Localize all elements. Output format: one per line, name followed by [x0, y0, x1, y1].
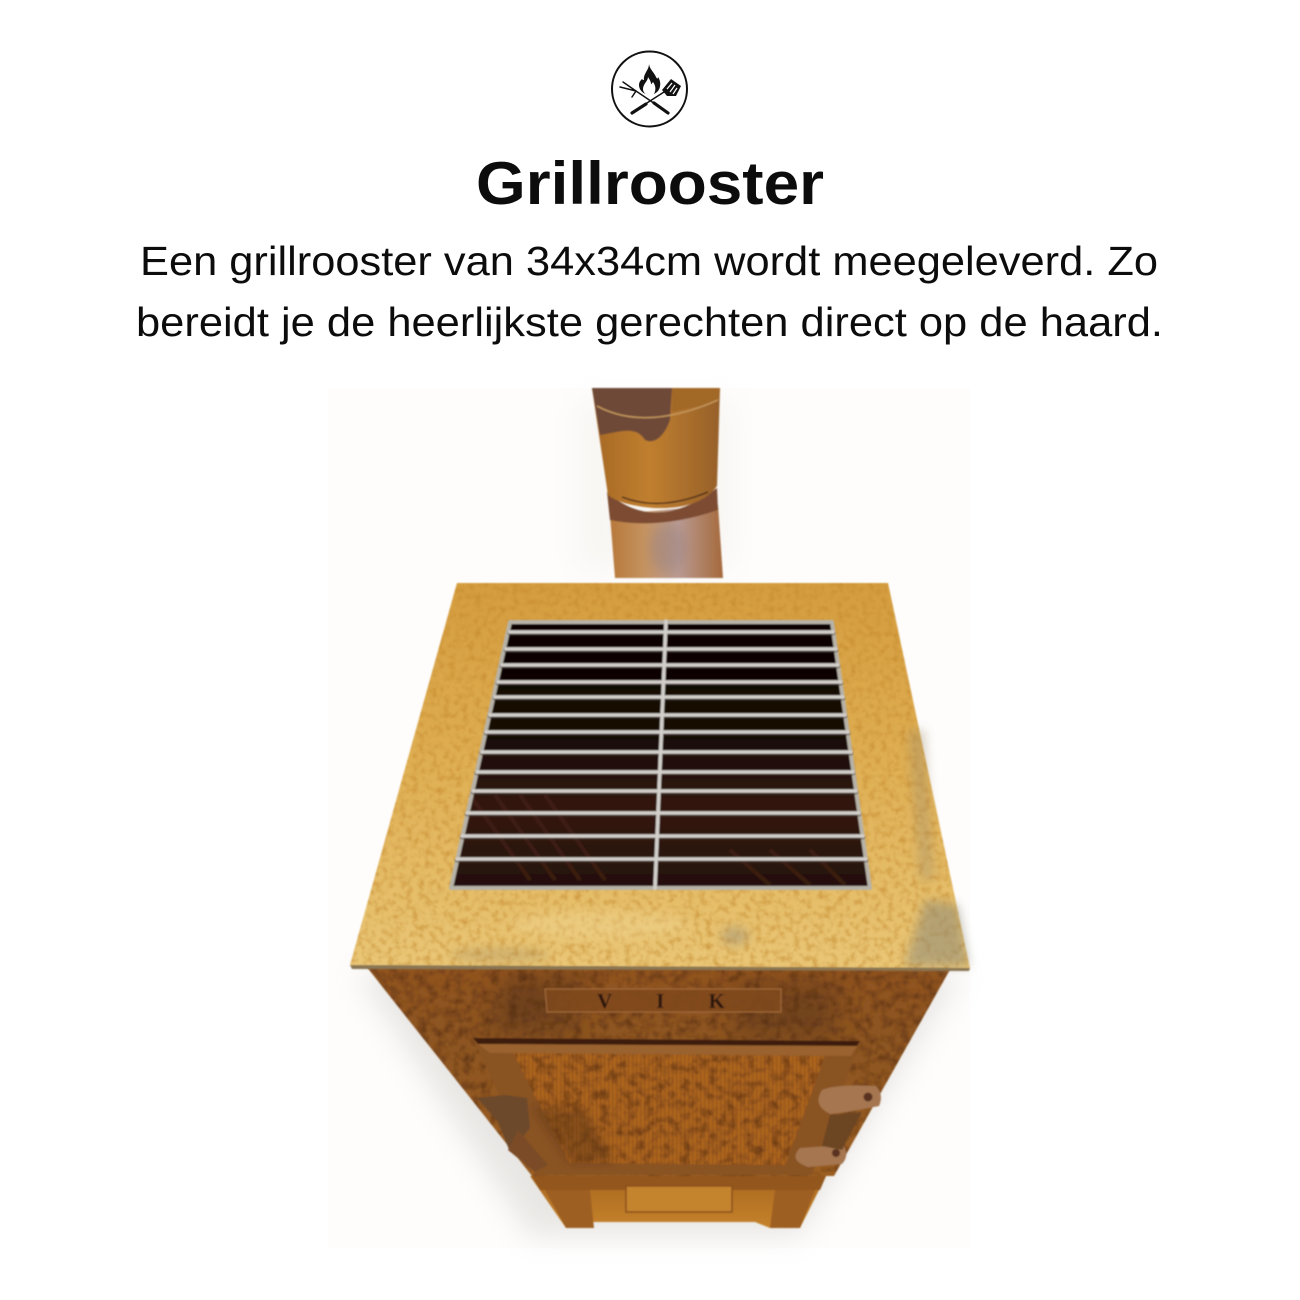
description text	[136, 238, 1163, 345]
icon: crossed grill tools and flame in a circle	[612, 52, 687, 126]
door hinges	[796, 1086, 881, 1167]
top steel plate	[350, 583, 970, 971]
title: Grillrooster	[476, 150, 824, 217]
VIK logo plate	[545, 989, 781, 1013]
description text: bereidt je de heerlijkste gerechten direct op de haard.	[136, 299, 1163, 345]
chimney pipe	[592, 388, 723, 578]
drawer and feet	[530, 1176, 826, 1228]
door frame with mesh panel	[473, 1038, 860, 1175]
description text: Een grillrooster van 34x34cm wordt meegeleverd. Zo	[140, 238, 1158, 284]
VIK logo plate: V I K	[597, 989, 726, 1013]
stainless steel grill grate	[451, 621, 870, 888]
photo: rusted corten steel stove seen from above	[328, 388, 970, 1248]
stove body front	[366, 966, 952, 1228]
